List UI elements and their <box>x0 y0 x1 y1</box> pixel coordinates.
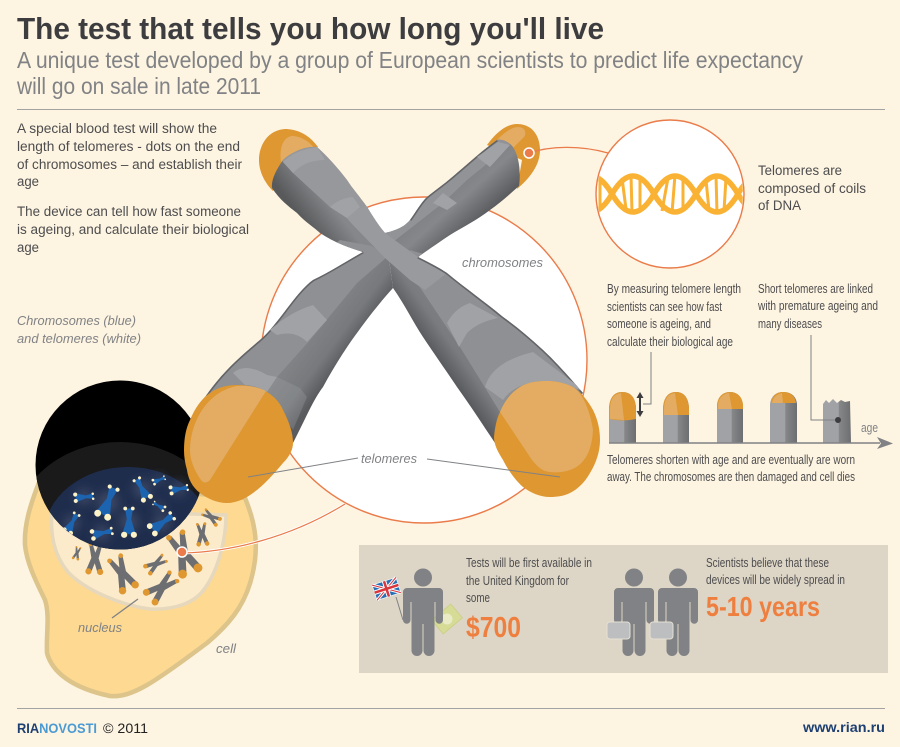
label: age: age <box>861 421 878 435</box>
figure: person with flag and money <box>372 568 462 656</box>
crossing highlight <box>345 205 447 290</box>
age axis arrow <box>609 437 893 449</box>
chromosome stage 5: worn <box>823 399 851 443</box>
chromosome stage 1 <box>609 392 636 443</box>
figure: years: 5-10 years <box>706 591 820 622</box>
microscope view <box>36 380 200 550</box>
icon: DNA helix <box>598 173 743 215</box>
footer: logo and copyright: © 2011 <box>103 720 148 736</box>
subtitle: A unique test developed by a group of European scientists to predict life expectancy <box>17 47 803 73</box>
text: short telomeres: many diseases <box>758 316 822 331</box>
grey chromosomes in nucleus <box>71 507 223 607</box>
edge shading <box>203 140 583 400</box>
figure: price: $700 <box>466 612 521 644</box>
text block: intro <box>17 121 249 255</box>
telomere: upper left <box>259 129 318 191</box>
text: first available <box>466 556 592 605</box>
label: telomeres: telomeres <box>361 451 417 466</box>
text block: intro: A special blood test will show the <box>17 121 217 136</box>
text: short telomeres <box>757 281 878 331</box>
text: measuring telomere length: someone is ageing, and <box>607 316 711 331</box>
arm: upper left <box>272 146 384 252</box>
icon: banknote <box>432 604 462 634</box>
icon: UK flag <box>372 577 401 600</box>
caption: chromosomes and telomeres: Chromosomes (blue) <box>17 313 136 328</box>
telomere: upper right <box>487 124 540 189</box>
text block: intro: age <box>17 174 39 189</box>
large chromosome <box>184 124 600 503</box>
label: nucleus: nucleus <box>78 620 122 635</box>
footer: logo and copyright: RIANOVOSTI <box>17 720 97 736</box>
text: first available: some <box>466 591 490 605</box>
telomere: lower left <box>184 385 293 503</box>
text block: intro: of chromosomes – and establish their <box>17 157 242 172</box>
connector: telomere to DNA circle <box>524 147 608 158</box>
chromosome bands <box>233 142 590 400</box>
subtitle: will go on sale in late 2011 <box>16 73 261 99</box>
arm: lower left <box>205 255 393 443</box>
figure: two people with briefcases <box>607 568 698 656</box>
text: telomeres composed of DNA: Telomeres are <box>758 163 842 178</box>
label: cell: cell <box>216 641 237 656</box>
arm: lower right <box>390 262 583 443</box>
double arrow <box>636 392 644 417</box>
caption: chromosomes and telomeres <box>17 313 141 346</box>
text: measuring telomere length <box>607 281 741 349</box>
chromosome stage 4 <box>770 392 797 443</box>
label: nucleus <box>78 599 138 635</box>
light sides of the arms <box>208 140 583 412</box>
text: measuring telomere length: calculate their biological age <box>607 334 733 349</box>
text block: intro: length of telomeres - dots on the end <box>17 139 240 154</box>
text: widely spread: Scientists believe that these <box>706 556 829 570</box>
label: chromosomes: chromosomes <box>462 255 543 270</box>
text: widely spread <box>706 556 845 587</box>
text: measuring telomere length: By measuring telomere length <box>607 281 741 296</box>
arm: upper right <box>385 140 520 257</box>
text block: intro: is ageing, and calculate their biological <box>17 222 249 237</box>
cell body <box>25 480 256 696</box>
text: telomeres composed of DNA: of DNA <box>758 198 801 213</box>
chart: telomere shortening with age <box>609 335 893 449</box>
title: The test that tells you how long you'll live <box>17 11 604 46</box>
text: telomeres composed of DNA: composed of coils <box>758 181 866 196</box>
panel: availability <box>359 545 888 673</box>
text: telomeres composed of DNA <box>758 163 866 213</box>
text: telomeres shorten <box>607 452 855 484</box>
chromosome stage 2 <box>663 392 689 443</box>
footer: logo and copyright <box>17 720 148 736</box>
connector: cell to magnified circle <box>177 504 345 557</box>
text block: intro: age <box>17 240 39 255</box>
text: measuring telomere length: scientists can see how fast <box>607 299 722 314</box>
cell illustration <box>15 380 256 696</box>
nucleus <box>52 510 226 609</box>
text: widely spread: devices will be widely spread in <box>706 573 845 587</box>
caption: chromosomes and telomeres: and telomeres (white) <box>17 331 141 346</box>
label: telomeres <box>248 451 560 477</box>
connector lines <box>643 352 651 404</box>
magnified circle background <box>261 197 587 523</box>
subtitle <box>16 47 803 99</box>
text: first available: the United Kingdom for <box>466 574 569 588</box>
chromosome stage 3 <box>717 392 743 443</box>
text block: intro: The device can tell how fast someone <box>17 204 241 219</box>
chromosome body <box>204 140 583 443</box>
footer: website: www.rian.ru <box>802 719 885 735</box>
telomere: lower right <box>494 381 600 497</box>
DNA circle <box>595 119 745 269</box>
text: first available: Tests will be first available in <box>466 556 592 570</box>
